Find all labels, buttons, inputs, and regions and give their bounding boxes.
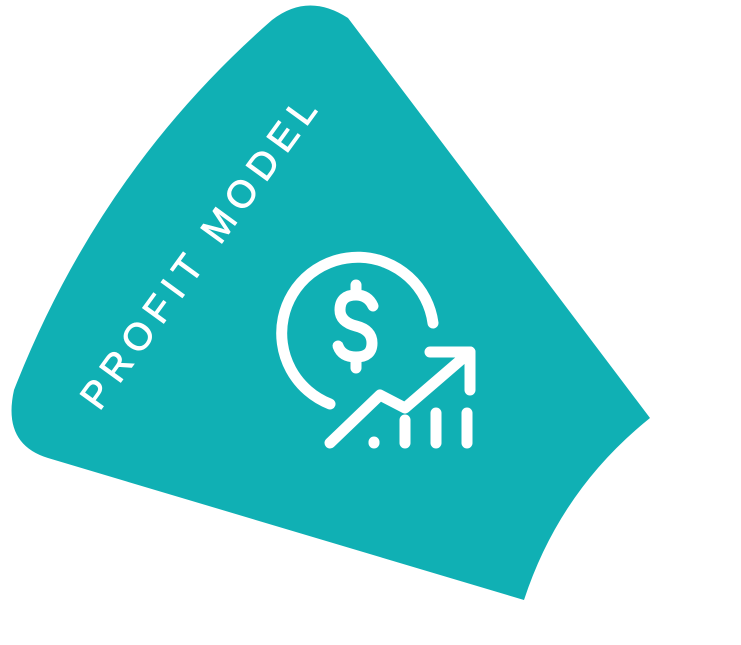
icon: bars — [374, 413, 467, 443]
icon: profit growth — [282, 257, 470, 443]
icon: coin circle — [282, 257, 433, 404]
icon: trend arrow — [330, 352, 470, 443]
panel: teal shape — [12, 5, 650, 600]
icon: dollar sign — [338, 285, 373, 368]
heading: PROFIT MODEL: PROFIT MODEL — [73, 85, 330, 417]
